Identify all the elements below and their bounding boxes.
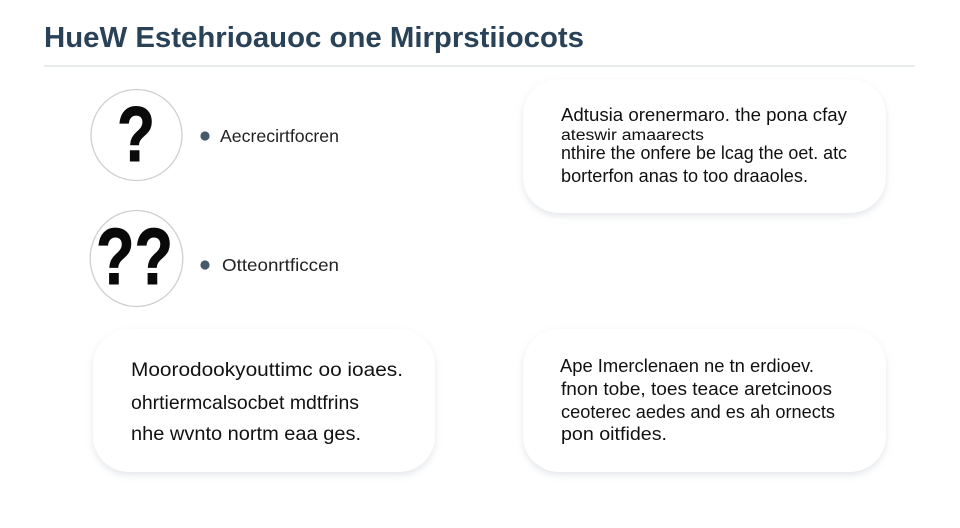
card text line 1: Ape Imerclenaen ne tn erdioev.: [560, 356, 814, 376]
panel: bottom right text card: ceoterec aedes and es ah ornects: [561, 402, 835, 422]
panel: top right text card: ateswir amaarects: [561, 127, 704, 144]
panel: bottom left text card: [93, 329, 435, 472]
panel: bottom right text card: [523, 329, 886, 472]
bullet label: first item: Aecrecirtfocren: [220, 126, 339, 146]
panel: bottom left text card: ohrtiermcalsocbet mdtfrins: [131, 392, 359, 414]
title: HueW Estehrioauoc one Mirprstiiocots: [44, 22, 584, 54]
panel: top right text card: [523, 79, 886, 213]
bullet label: second item: Otteonrtficcen: [222, 255, 339, 275]
icon: single question mark in circle: [91, 90, 182, 180]
panel: top right text card: borterfon anas to too draaoles.: [561, 166, 808, 186]
card text line 1: Adtusia orenermaro. the pona cfay: [561, 105, 847, 125]
panel: bottom left text card: nhe wvnto nortm eaa ges.: [131, 423, 361, 445]
icon: double question mark in circle: ??: [96, 212, 173, 301]
panel: top right text card: nthire the onfere be lcag the oet. atc: [561, 143, 847, 163]
icon: single question mark in circle: ?: [117, 90, 155, 178]
panel: bottom right text card: fnon tobe, toes teace aretcinoos: [561, 379, 832, 399]
panel: bottom right text card: pon oitfides.: [561, 424, 667, 444]
card text line 1: Moorodookyouttimc oo ioaes.: [131, 359, 403, 381]
